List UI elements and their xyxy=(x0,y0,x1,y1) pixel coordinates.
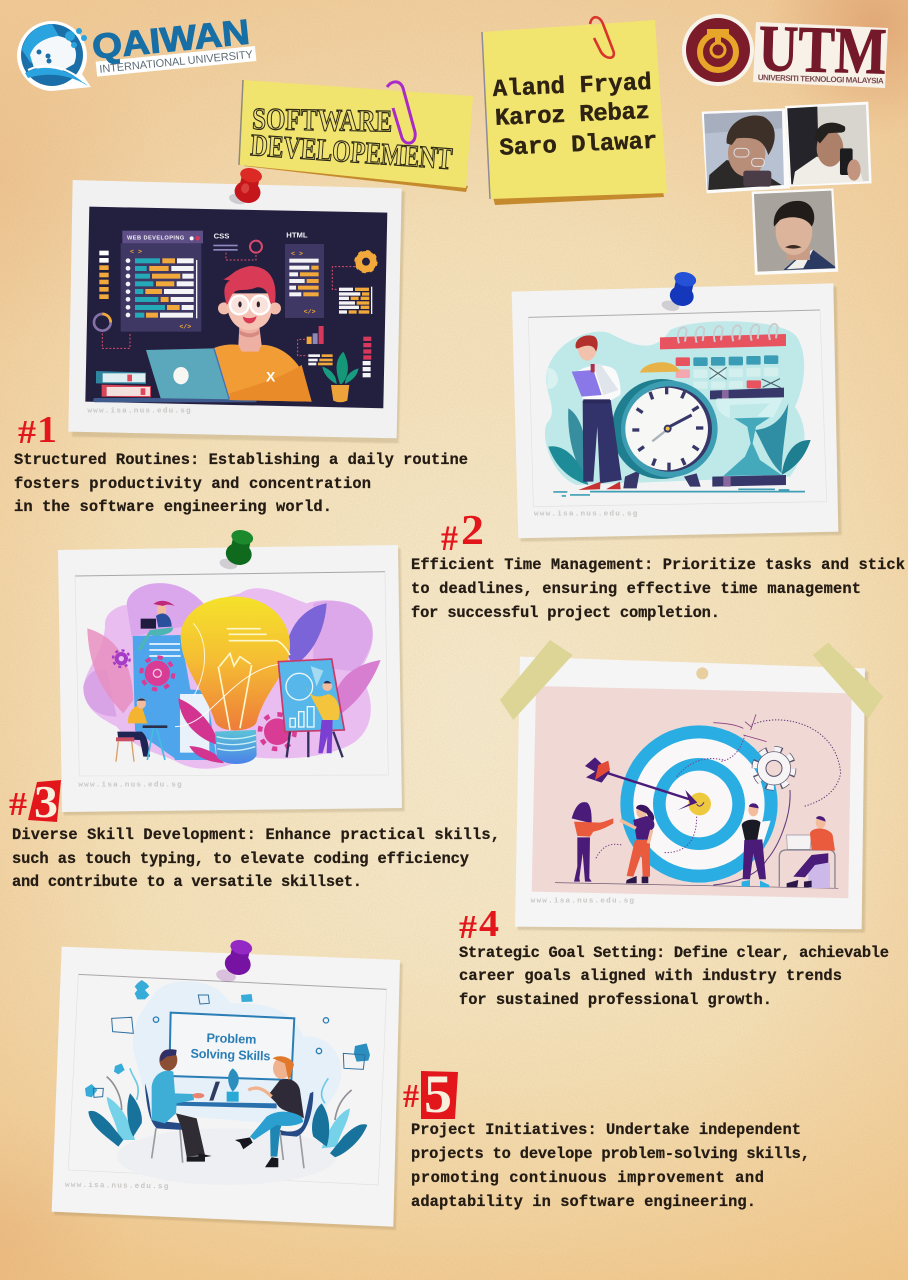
watermark: www.isa.nus.edu.sg xyxy=(534,510,638,518)
watermark: www.isa.nus.edu.sg xyxy=(531,898,634,906)
title text xyxy=(250,101,454,176)
text block: item 4: for sustained professional growth. xyxy=(459,991,772,1009)
watermark: www.isa.nus.edu.sg xyxy=(78,782,182,790)
number: #4 xyxy=(459,903,499,946)
illustration: web developer: CSS xyxy=(214,232,229,241)
tape right xyxy=(813,643,883,718)
illustration: web developer: X xyxy=(266,368,276,384)
text block: item 4: career goals aligned with industry trends xyxy=(459,967,842,985)
names text: Karoz Rebaz xyxy=(494,99,651,133)
text block: item 3 xyxy=(12,826,500,891)
photo: team member 3 xyxy=(752,188,838,275)
text block: item 2: for successful project completion. xyxy=(411,604,720,622)
illustration: web developer xyxy=(93,230,376,402)
icon: purple paperclip xyxy=(387,82,415,143)
number: #4: 4 xyxy=(479,903,499,945)
icon: punched hole xyxy=(696,667,708,679)
illustration: web developer: < > xyxy=(291,249,303,257)
photo card 5 xyxy=(52,947,403,1230)
illustration: web developer: </> xyxy=(304,307,316,315)
pushpin: red xyxy=(228,165,265,208)
text block: item 2 xyxy=(411,556,905,622)
illustration: time management xyxy=(545,321,811,496)
title text: SOFTWARE xyxy=(252,101,392,138)
names text: Saro Dlawar xyxy=(499,129,658,163)
text block: item 3: such as touch typing, to elevate coding efficiency xyxy=(12,850,469,868)
photo: team member 2 xyxy=(785,102,872,187)
text block: item 2: Efficient Time Management: Prioritize tasks and stick xyxy=(411,556,905,574)
number: #1: # xyxy=(18,414,36,451)
text block: item 1 xyxy=(14,451,468,516)
logo: Qaiwan International University: INTERNATIONAL UNIVERSITY xyxy=(99,49,254,76)
number: #5: 5 xyxy=(424,1064,452,1124)
photo card 3 xyxy=(58,545,405,815)
text block: item 4 xyxy=(459,944,889,1009)
illustration: problem solving: Problem xyxy=(206,1031,257,1047)
logo: Universiti Teknologi Malaysia: UNIVERSITI TEKNOLOGI MALAYSIA xyxy=(758,73,884,86)
title text: DEVELOPEMENT xyxy=(250,127,454,176)
tape left xyxy=(500,640,573,720)
photo card 1 xyxy=(68,180,405,443)
number: #2: 2 xyxy=(461,508,484,554)
text block: item 3: and contribute to a versatile skillset. xyxy=(12,873,362,891)
text block: item 1: fosters productivity and concentration xyxy=(14,475,371,493)
illustration: problem solving xyxy=(85,980,370,1185)
number: #5: # xyxy=(403,1078,419,1115)
number: #2 xyxy=(441,508,484,558)
text block: item 5: promoting continuous improvement and xyxy=(411,1169,764,1187)
text block: item 5 xyxy=(411,1121,810,1211)
photo: team member 1 xyxy=(702,108,790,193)
number: #1 xyxy=(18,409,57,451)
text block: item 1: Structured Routines: Establishing a daily routine xyxy=(14,451,468,469)
logo: Qaiwan International University: QAIWAN xyxy=(90,13,251,67)
illustration: problem solving: Solving Skills xyxy=(190,1047,271,1063)
sticky note: team names xyxy=(482,17,667,205)
number: #5 xyxy=(403,1064,458,1124)
names text: Aland Fryad xyxy=(492,70,652,104)
photo card 2 xyxy=(512,283,842,542)
text block: item 5: projects to develope problem-solving skills, xyxy=(411,1145,810,1163)
illustration: web developer: </> xyxy=(179,322,191,330)
number: #3: 3 xyxy=(34,776,58,827)
pushpin: purple xyxy=(215,936,255,986)
illustration: web developer: WEB DEVELOPING xyxy=(127,235,185,241)
text block: item 3: Diverse Skill Development: Enhance practical skills, xyxy=(12,826,500,844)
pushpin: green xyxy=(219,527,256,573)
watermark: www.isa.nus.edu.sg xyxy=(87,407,191,415)
photo card 4 xyxy=(500,640,883,933)
text block: item 5: Project Initiatives: Undertake independent xyxy=(411,1121,801,1139)
illustration: target and team xyxy=(555,714,841,888)
text block: item 5: adaptability in software engineering. xyxy=(411,1193,756,1211)
icon: red paperclip xyxy=(590,17,614,58)
number: #3: # xyxy=(9,786,27,823)
illustration: web developer: HTML xyxy=(286,230,308,239)
names text xyxy=(492,70,658,163)
pushpin: blue xyxy=(661,269,698,315)
logo: Universiti Teknologi Malaysia xyxy=(682,12,888,89)
text block: item 1: in the software engineering world. xyxy=(14,498,332,516)
sticky note: title xyxy=(239,80,473,192)
number: #3 xyxy=(9,776,61,827)
illustration: skill development lightbulb xyxy=(83,583,381,769)
text block: item 2: to deadlines, ensuring effective time management xyxy=(411,580,861,598)
watermark: www.isa.nus.edu.sg xyxy=(65,1182,169,1191)
number: #1: 1 xyxy=(37,409,57,451)
illustration: web developer: < > xyxy=(130,247,142,255)
text block: item 4: Strategic Goal Setting: Define clear, achievable xyxy=(459,944,889,962)
logo: Qaiwan International University xyxy=(17,12,256,91)
number: #2: # xyxy=(441,518,458,558)
number: #4: # xyxy=(459,909,477,946)
